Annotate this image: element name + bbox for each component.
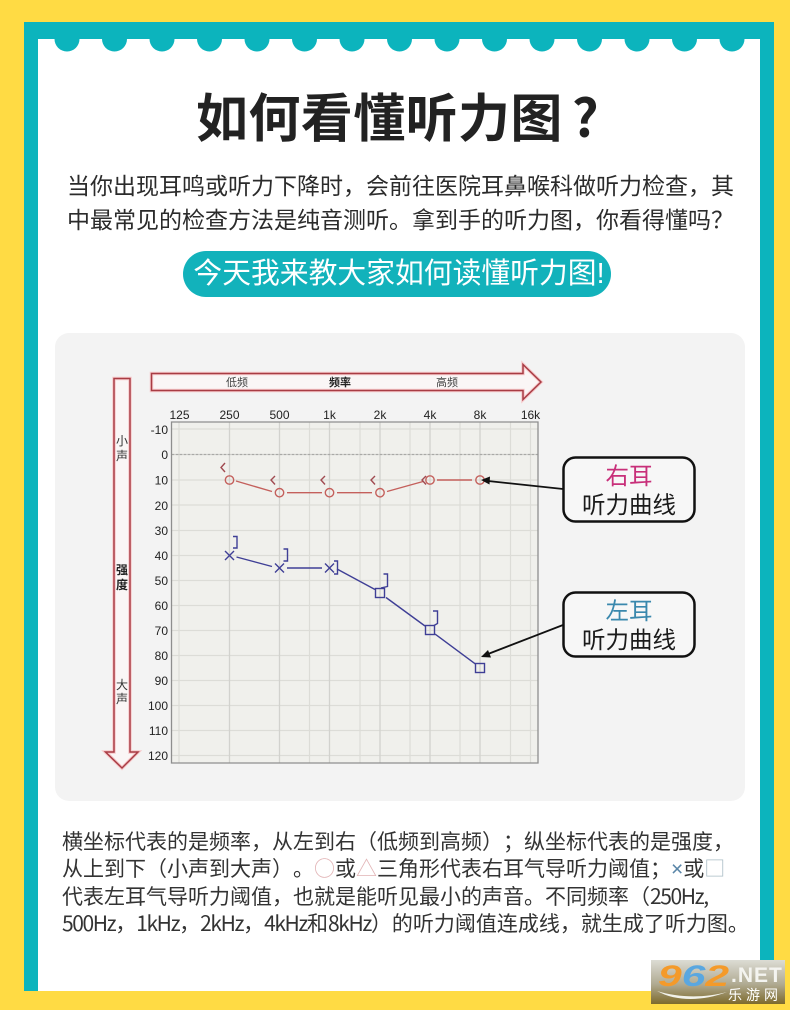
y axis decibel labels: 120 xyxy=(148,749,168,763)
arrow: intensity axis: 强 xyxy=(116,563,128,577)
watermark domain: .NET xyxy=(731,964,783,987)
y axis decibel labels: 80 xyxy=(155,649,168,663)
footer explanation text: 从上到下（小声到大声）。○或△三角形代表右耳气导听力阈值；×或□ xyxy=(62,853,725,883)
watermark site name: 乐游网 xyxy=(728,987,782,1003)
arrow: frequency axis: 低频 xyxy=(226,375,248,389)
intro text xyxy=(67,173,734,233)
right ear curve xyxy=(221,463,484,497)
title: 如何看懂听力图? xyxy=(196,77,599,152)
x axis frequency labels: 250 xyxy=(219,408,240,422)
callout: right ear xyxy=(564,458,694,522)
teal pill subtitle: 今天我来教大家如何读懂听力图! xyxy=(193,258,605,290)
callout: right ear: 听力曲线 xyxy=(582,492,676,518)
arrow: intensity axis: 大 xyxy=(116,678,128,692)
x axis frequency labels: 16k xyxy=(521,408,541,422)
y axis decibel labels: 30 xyxy=(155,524,168,538)
callout: left ear: 听力曲线 xyxy=(582,627,676,653)
y axis decibel labels: -10 xyxy=(151,423,168,437)
y axis decibel labels: 20 xyxy=(155,499,168,513)
x axis frequency labels: 8k xyxy=(474,408,487,422)
arrow: intensity axis xyxy=(106,378,138,768)
watermark logo xyxy=(651,960,785,1004)
y axis decibel labels xyxy=(148,423,168,763)
arrow: intensity axis: 声 xyxy=(116,692,128,706)
x axis frequency labels: 2k xyxy=(374,408,387,422)
footer explanation text: 横坐标代表的是频率，从左到右（低频到高频）；纵坐标代表的是强度， xyxy=(62,826,734,856)
left ear curve xyxy=(225,536,484,672)
y axis decibel labels: 90 xyxy=(155,674,168,688)
x axis frequency labels: 500 xyxy=(269,408,290,422)
y axis decibel labels: 70 xyxy=(155,624,168,638)
arrow: intensity axis: 小 xyxy=(116,434,128,448)
callout: left ear xyxy=(564,592,694,656)
watermark number: 962 xyxy=(658,960,729,993)
arrow: left ear pointer xyxy=(481,625,563,658)
footer explanation text xyxy=(62,826,749,938)
y axis decibel labels: 60 xyxy=(155,599,168,613)
arrow: frequency axis: 频率 xyxy=(329,375,351,389)
plot area with grid xyxy=(172,422,538,764)
panel: audiogram card xyxy=(55,333,745,801)
x axis frequency labels: 125 xyxy=(169,408,190,422)
x axis frequency labels: 4k xyxy=(424,408,437,422)
y axis decibel labels: 100 xyxy=(148,699,168,713)
intro text: 当你出现耳鸣或听力下降时，会前往医院耳鼻喉科做听力检查，其 xyxy=(67,173,734,199)
y axis decibel labels: 0 xyxy=(161,448,168,462)
intro text: 中最常见的检查方法是纯音测听。拿到手的听力图，你看得懂吗？ xyxy=(67,207,734,233)
arrow: intensity axis: 声 xyxy=(116,449,128,463)
x axis frequency labels xyxy=(169,408,541,422)
arrow: frequency axis xyxy=(152,364,541,400)
arrow: intensity axis: 度 xyxy=(116,577,128,592)
teal pill subtitle xyxy=(183,251,611,297)
arrow: right ear pointer xyxy=(481,476,563,489)
y axis decibel labels: 110 xyxy=(149,724,168,738)
watermark swoosh xyxy=(657,991,726,999)
footer explanation text: 500Hz，1kHz，2kHz，4kHz和8kHz）的听力阈值连成线，就生成了听力图。 xyxy=(62,908,749,938)
footer explanation text: 代表左耳气导听力阈值，也就是能听见最小的声音。不同频率（250Hz, xyxy=(62,881,709,911)
callout: right ear: 右耳 xyxy=(606,463,652,489)
y axis decibel labels: 40 xyxy=(155,549,168,563)
x axis frequency labels: 1k xyxy=(323,408,337,422)
arrow: frequency axis: 高频 xyxy=(436,375,458,389)
y axis decibel labels: 50 xyxy=(155,574,168,588)
callout: left ear: 左耳 xyxy=(606,598,652,624)
y axis decibel labels: 10 xyxy=(155,474,168,488)
